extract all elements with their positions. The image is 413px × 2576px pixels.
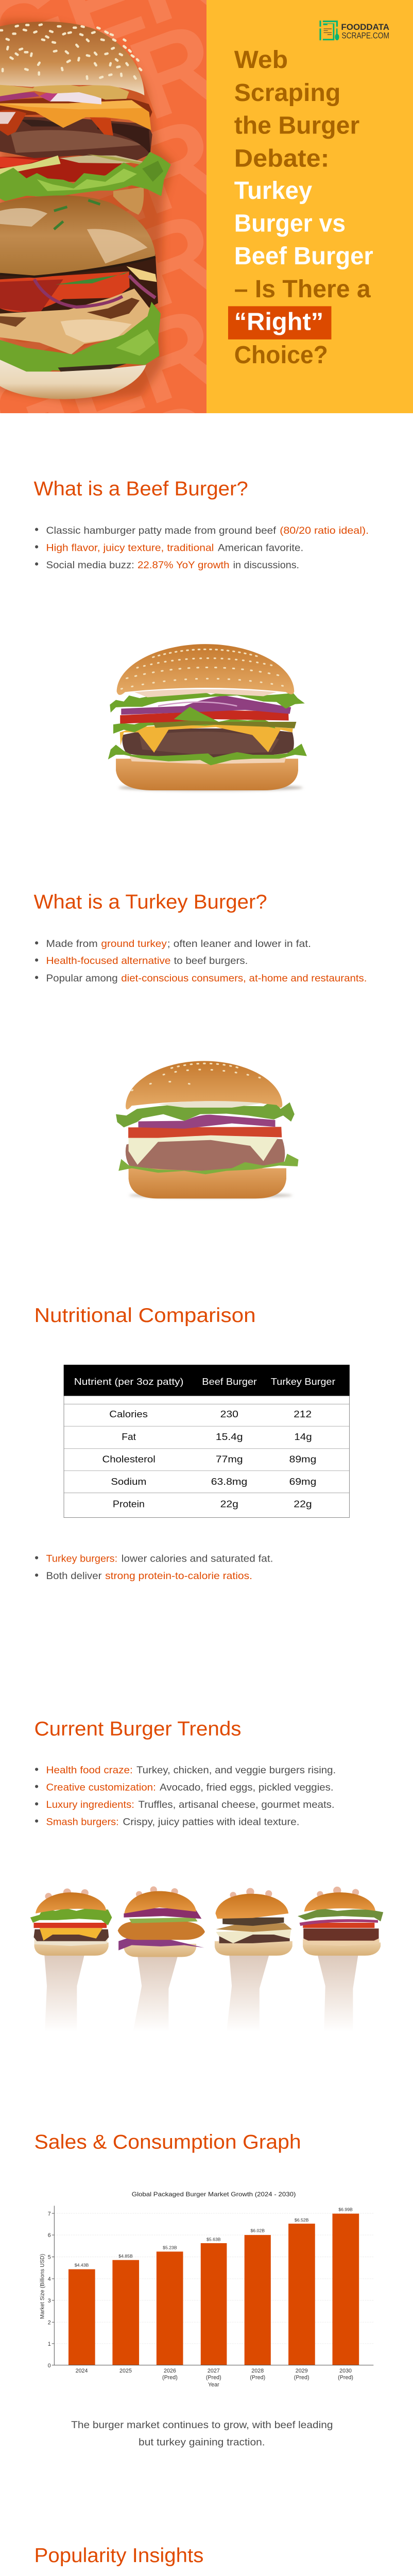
value labels: $6.99B	[338, 2207, 353, 2212]
bullet list: Turkey, chicken, and veggie burgers rising.	[136, 1765, 336, 1776]
dark bun edge	[0, 255, 158, 316]
back bun piece	[113, 187, 144, 215]
pickles	[0, 156, 61, 175]
bar chart	[39, 2191, 373, 2388]
bullet list: Health food craze:	[46, 1765, 133, 1776]
onion ring	[34, 279, 123, 307]
title: Burger vs	[234, 210, 346, 238]
bullet list: ground turkey	[101, 938, 167, 950]
image: hand with veggie burger	[298, 1887, 383, 2032]
x axis labels: Year	[208, 2382, 219, 2388]
panel: hero	[0, 0, 413, 413]
lower lettuce	[0, 302, 161, 377]
comparison table: 63.8mg	[211, 1477, 247, 1487]
bullet list: Social media buzz:	[46, 560, 134, 571]
x axis labels: (Pred)	[162, 2375, 178, 2381]
bullet list: Creative customization:	[46, 1782, 156, 1793]
image: turkey burger	[116, 1061, 299, 1198]
comparison table: 22g	[220, 1499, 238, 1510]
bullet list	[35, 938, 367, 984]
logo: top: FOODDATA	[341, 22, 389, 32]
value labels	[75, 2207, 353, 2267]
bullet list: American favorite.	[218, 543, 303, 554]
x axis labels: 2027	[208, 2368, 220, 2374]
comparison table: 212	[294, 1409, 312, 1420]
comparison table: Nutrient (per 3oz patty)	[74, 1377, 184, 1387]
comparison table: Beef Burger	[202, 1377, 257, 1387]
heading: What is a Turkey Burger?	[33, 891, 267, 913]
title: the Burger	[234, 111, 359, 139]
y axis labels	[48, 2211, 51, 2369]
title: “Right”	[234, 308, 323, 335]
top bun	[0, 22, 144, 95]
title: Debate:	[234, 144, 329, 172]
comparison table: Turkey Burger	[271, 1377, 335, 1387]
value labels: $4.85B	[118, 2253, 133, 2259]
comparison table: 22g	[294, 1499, 312, 1510]
bullet list: (80/20 ratio ideal).	[280, 525, 369, 536]
bars	[68, 2214, 359, 2365]
image: hand with crispy burger	[118, 1886, 205, 2032]
bullet list: Avocado, fried eggs, pickled veggies.	[160, 1782, 334, 1793]
x axis labels: 2025	[119, 2368, 132, 2374]
comparison table: Sodium	[111, 1477, 146, 1487]
value labels: $5.63B	[206, 2236, 221, 2242]
comparison table: 69mg	[289, 1477, 316, 1487]
title: Turkey	[234, 177, 312, 205]
heading: Sales & Consumption Graph	[34, 2131, 301, 2153]
x axis labels: (Pred)	[338, 2375, 353, 2381]
bullet list: Classic hamburger patty made from ground beef	[46, 525, 277, 536]
bullet list: Turkey burgers:	[46, 1553, 117, 1565]
cheese	[0, 100, 151, 130]
x axis labels: 2030	[339, 2368, 352, 2374]
grilled chicken	[0, 289, 150, 354]
x axis labels: (Pred)	[294, 2375, 309, 2381]
onion	[40, 92, 101, 105]
x axis labels: 2026	[164, 2368, 176, 2374]
bullet list: diet-conscious consumers, at-home and restaurants.	[121, 973, 367, 984]
heading: What is a Beef Burger?	[33, 478, 248, 500]
top lettuce	[0, 153, 170, 200]
mustard	[0, 84, 129, 100]
bullet list: Crispy, juicy patties with ideal texture.	[123, 1817, 300, 1828]
bullet list	[35, 1553, 273, 1582]
logo: top	[319, 21, 389, 41]
bullet list: Both deliver	[46, 1570, 102, 1582]
bullet list: Luxury ingredients:	[46, 1799, 134, 1810]
heading: Current Burger Trends	[34, 1718, 242, 1740]
value labels: $6.52B	[295, 2217, 309, 2223]
panel: what is a turkey burger	[33, 891, 367, 1199]
panel: current burger trends	[30, 1718, 383, 2023]
comparison table: Cholesterol	[102, 1454, 156, 1465]
y axis labels: 1	[48, 2341, 51, 2347]
value labels: $4.43B	[75, 2262, 89, 2267]
caption	[71, 2419, 333, 2448]
x axis labels: 2028	[251, 2368, 264, 2374]
second bun top	[0, 195, 156, 277]
bullet list	[35, 525, 369, 571]
caption: but turkey gaining traction.	[139, 2436, 265, 2448]
bullet list: Smash burgers:	[46, 1817, 119, 1828]
x axis labels: 2029	[296, 2368, 308, 2374]
tomato	[0, 157, 121, 182]
image: stacked hero burgers	[0, 20, 174, 403]
comparison table: 14g	[294, 1432, 312, 1443]
title: Scraping	[234, 79, 340, 107]
logo icon	[319, 21, 339, 40]
y axis labels: 4	[48, 2276, 51, 2282]
y axis labels: 2	[48, 2320, 51, 2326]
title	[228, 46, 373, 369]
bullet list: ; often leaner and lower in fat.	[167, 938, 311, 950]
x axis labels	[76, 2368, 353, 2388]
y axis labels: 7	[48, 2211, 51, 2217]
panel: nutritional comparison	[34, 1304, 350, 1582]
comparison table: Calories	[109, 1409, 148, 1420]
bullet list: lower calories and saturated fat.	[122, 1553, 273, 1565]
heading: Nutritional Comparison	[34, 1304, 256, 1327]
bullet list: strong protein-to-calorie ratios.	[105, 1570, 252, 1582]
comparison table: Protein	[113, 1499, 145, 1510]
title: – Is There a	[234, 275, 371, 303]
panel: what is a beef burger	[33, 478, 369, 792]
bullet list	[35, 1765, 336, 1828]
tomato 2	[0, 272, 130, 312]
bullet list: Truffles, artisanal cheese, gourmet meats.	[139, 1799, 335, 1810]
bullet list: Made from	[46, 938, 98, 950]
x axis labels: (Pred)	[206, 2375, 221, 2381]
comparison table: 77mg	[216, 1454, 243, 1465]
bullet list: High flavor, juicy texture, traditional	[46, 543, 214, 554]
y axis labels: 0	[48, 2363, 51, 2369]
patty	[0, 116, 152, 160]
bullet list: in discussions.	[233, 560, 299, 571]
comparison table: 230	[220, 1409, 238, 1420]
watermark text	[0, 0, 206, 413]
heading: Popularity Insights	[34, 2545, 203, 2567]
y axis labels: 5	[48, 2255, 51, 2261]
title: Choice?	[234, 341, 328, 369]
bar chart: Global Packaged Burger Market Growth (2024 - 2030)	[132, 2191, 296, 2198]
image: hand with classic burger	[30, 1888, 112, 2032]
title: Web	[234, 46, 288, 74]
y axis labels: 6	[48, 2232, 51, 2239]
image: hand with mushroom burger	[215, 1888, 292, 2032]
title: Beef Burger	[234, 242, 373, 270]
logo: top: SCRAPE.COM	[341, 31, 389, 41]
x axis labels: 2024	[76, 2368, 88, 2374]
bottom bun	[0, 360, 146, 399]
comparison table: 15.4g	[216, 1432, 243, 1443]
x axis labels: (Pred)	[250, 2375, 265, 2381]
bar chart: Market Size (Billions USD)	[39, 2254, 45, 2319]
panel: sales and consumption graph	[34, 2131, 374, 2448]
sesame seeds	[0, 25, 141, 79]
caption: The burger market continues to grow, with beef leading	[71, 2419, 333, 2431]
y axis labels: 3	[48, 2298, 51, 2304]
image: beef burger	[108, 644, 307, 791]
comparison table: Fat	[122, 1432, 136, 1443]
sauce and bacon	[0, 96, 152, 117]
bullet list: 22.87% YoY growth	[137, 560, 230, 571]
comparison table	[64, 1365, 350, 1518]
value labels: $5.23B	[163, 2245, 177, 2250]
bullet list: Popular among	[46, 973, 118, 984]
bullet list: to beef burgers.	[174, 955, 248, 967]
value labels: $6.02B	[250, 2228, 265, 2233]
comparison table: 89mg	[289, 1454, 316, 1465]
bullet list: Health-focused alternative	[46, 955, 170, 967]
